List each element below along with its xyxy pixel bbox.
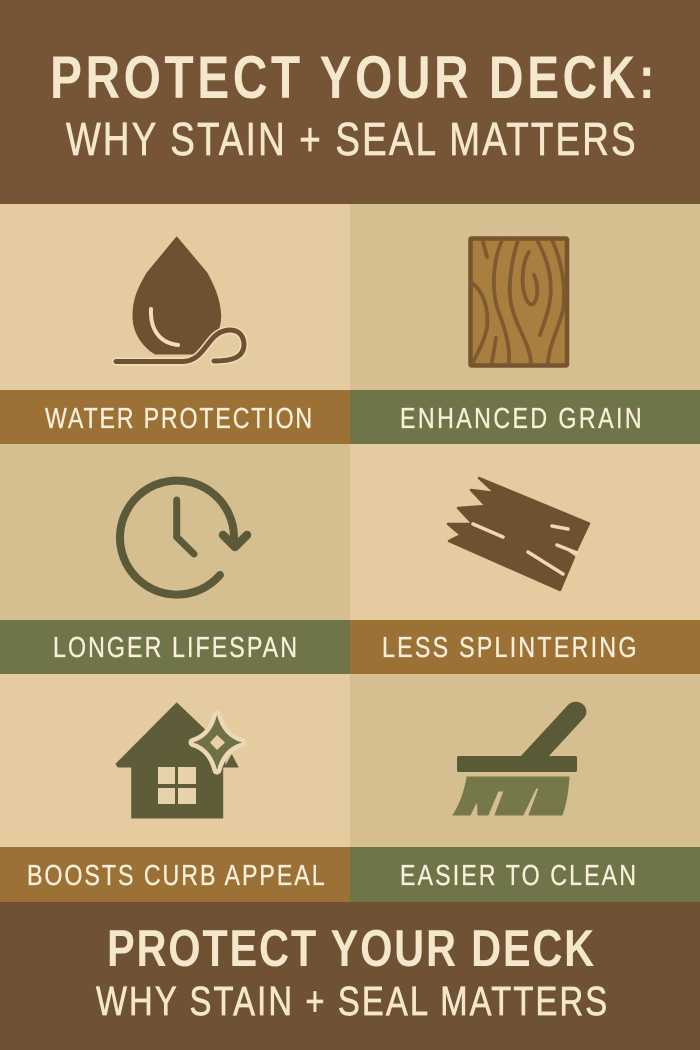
band: easier to clean: [350, 847, 700, 902]
icon: water drop: [116, 237, 244, 362]
band: longer lifespan: LONGER LIFESPAN: [53, 630, 297, 664]
panel: boosts curb appeal: [0, 674, 350, 847]
panel: longer lifespan: [0, 444, 350, 620]
band: water protection: [0, 390, 350, 444]
band: easier to clean: EASIER TO CLEAN: [400, 858, 636, 892]
band: water protection: WATER PROTECTION: [45, 401, 312, 435]
panel: enhanced grain: [350, 204, 700, 390]
icon: splintered plank: [448, 478, 589, 590]
footer title: PROTECT YOUR DECK: [107, 919, 594, 977]
band: less splintering: LESS SPLINTERING: [382, 630, 636, 664]
icon: house with sparkle: [116, 703, 242, 818]
subtitle: WHY STAIN + SEAL MATTERS: [66, 113, 636, 165]
icon: wood grain: [470, 238, 567, 366]
icon: clock with arrow: [120, 481, 247, 595]
title: PROTECT YOUR DECK:: [50, 44, 655, 111]
band: boosts curb appeal: BOOSTS CURB APPEAL: [27, 858, 325, 892]
band: boosts curb appeal: [0, 847, 350, 902]
band: longer lifespan: [0, 620, 350, 674]
band: enhanced grain: ENHANCED GRAIN: [400, 401, 642, 435]
panel: less splintering: [350, 444, 700, 620]
panel: water protection: [0, 204, 350, 390]
band: less splintering: [350, 620, 700, 674]
header panel: [0, 0, 700, 204]
footer panel: [0, 902, 700, 1050]
footer subtitle: WHY STAIN + SEAL MATTERS: [96, 977, 607, 1024]
panel: easier to clean: [350, 674, 700, 847]
icon: brush: [453, 702, 586, 815]
band: enhanced grain: [350, 390, 700, 444]
